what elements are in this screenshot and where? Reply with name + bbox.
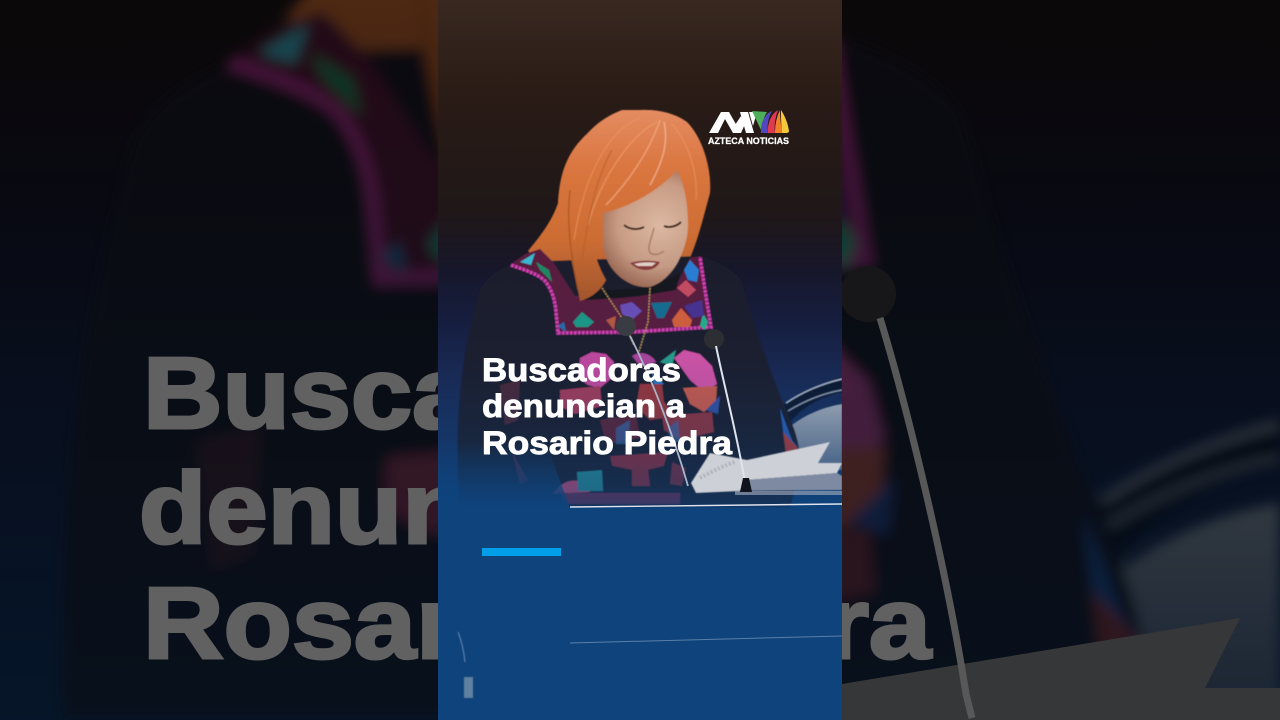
headline: Buscadoras: [482, 352, 681, 388]
enlarged headline: [142, 356, 934, 660]
enlarged paper: [842, 618, 1280, 720]
lower part of blouse: [458, 452, 798, 510]
logo rainbow mark: [752, 110, 789, 133]
microphone left: [616, 316, 688, 486]
faint microphone: [458, 632, 473, 698]
lower desk line: [570, 636, 842, 643]
headline: [482, 352, 732, 461]
lectern ledge: [735, 491, 842, 495]
enlarged headline: denuncian a: [139, 453, 783, 565]
logo wordmark: AZTECA NOTICIAS: [708, 136, 789, 146]
microphone right: [704, 329, 752, 492]
headline: denuncian a: [482, 388, 685, 424]
blue tint on background: [64, 354, 1280, 718]
logo letters AN: [709, 112, 757, 133]
headline: Rosario Piedra: [482, 425, 732, 461]
enlarged microphone stem: [880, 318, 972, 718]
enlarged headline: Rosario Piedra: [143, 568, 932, 680]
lectern edge line: [570, 504, 842, 507]
photo: speaker at lectern: [458, 110, 842, 472]
left side fade: [457, 450, 570, 508]
panel: central video frame: [438, 0, 842, 720]
logo: Azteca Noticias: [708, 110, 789, 146]
enlarged microphone head: [840, 266, 896, 322]
enlarged headline: Buscadoras: [143, 338, 773, 450]
hall backdrop: [438, 0, 842, 508]
accent bar: [482, 548, 561, 556]
blue gradient overlay: [456, 298, 842, 511]
papers on lectern: [691, 442, 842, 493]
